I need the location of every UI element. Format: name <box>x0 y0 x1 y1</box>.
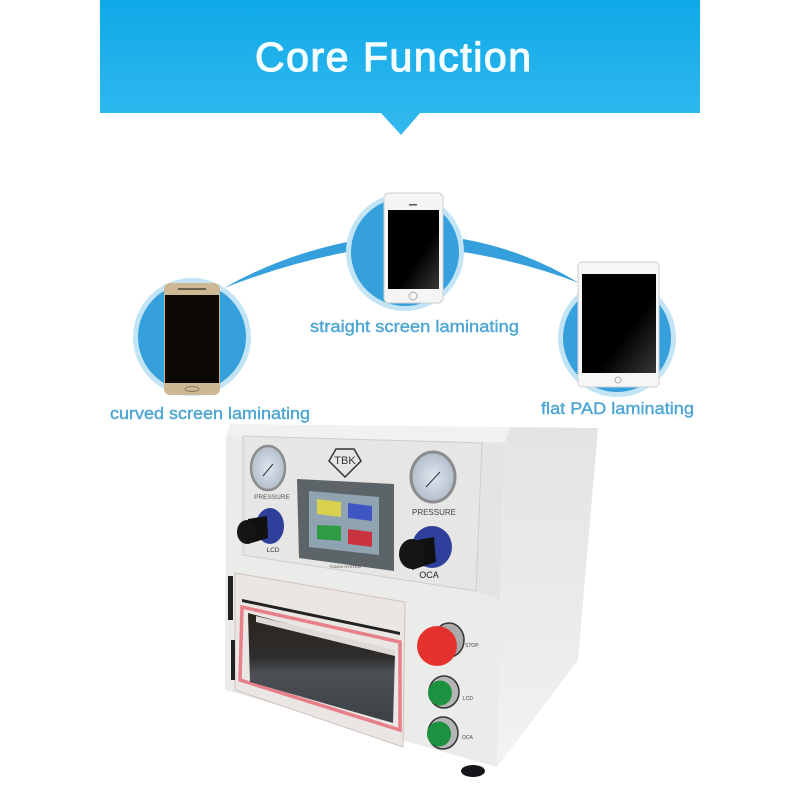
laminating machine <box>225 424 598 777</box>
vacuum chamber door <box>228 573 405 747</box>
OCA button <box>427 717 474 749</box>
LCD button: LCD <box>463 696 473 702</box>
label: flat PAD laminating: flat PAD laminating <box>541 400 694 418</box>
connecting arcs <box>224 239 579 288</box>
label: curved screen laminating: curved screen laminating <box>110 405 310 423</box>
right regulator knob <box>399 526 452 580</box>
touch screen <box>297 479 394 571</box>
right pressure gauge: PRESSURE <box>412 508 456 517</box>
device: straight screen phone <box>346 193 464 311</box>
right pressure gauge <box>411 452 456 517</box>
device: curved screen phone <box>133 278 251 396</box>
right regulator knob: OCA <box>419 570 439 580</box>
left pressure gauge: PRESSURE <box>254 494 291 501</box>
machine body <box>225 424 598 777</box>
title: Core Function <box>255 34 531 80</box>
OCA button: OCA <box>462 735 474 741</box>
stop button: STOP <box>465 643 479 649</box>
stop button <box>417 623 479 666</box>
device: tablet <box>558 262 676 397</box>
TBK logo <box>329 449 361 477</box>
label: straight screen laminating: straight screen laminating <box>310 318 519 336</box>
left regulator knob <box>237 508 284 554</box>
header banner <box>100 0 700 135</box>
left regulator knob: LCD <box>266 547 280 554</box>
LCD button <box>428 676 473 708</box>
touch screen: TOUCH SYSTEM <box>329 564 361 569</box>
TBK logo: TBK <box>334 455 356 467</box>
left pressure gauge <box>251 446 291 501</box>
